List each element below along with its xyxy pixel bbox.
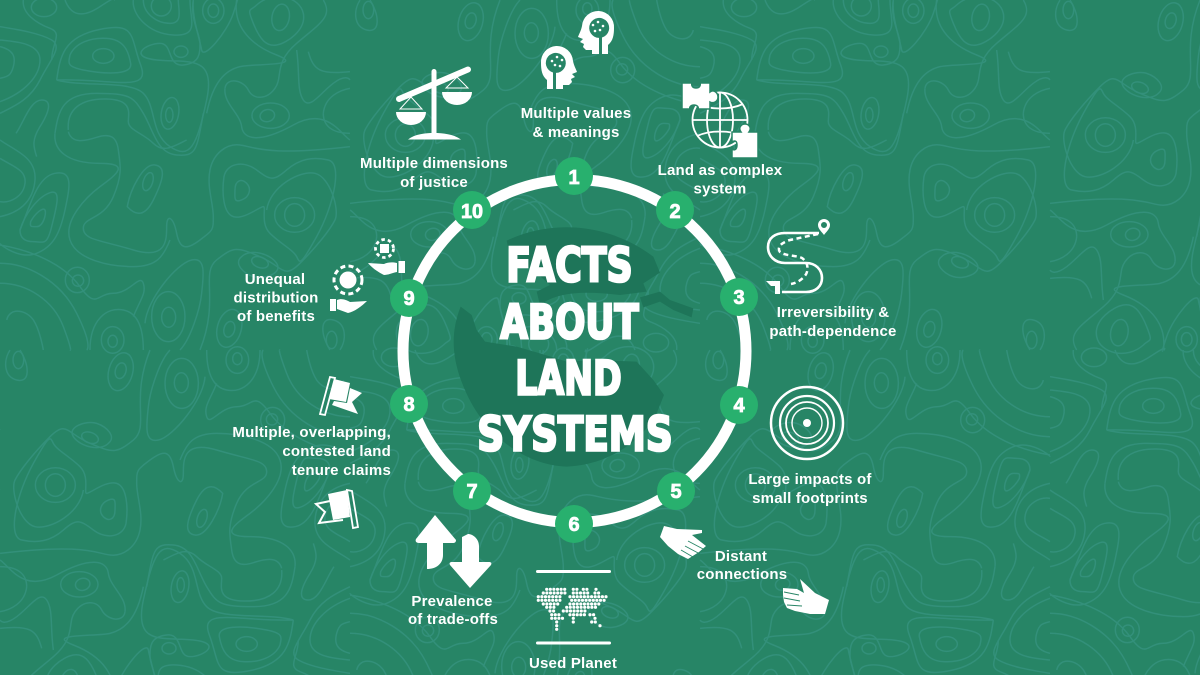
title: ABOUT [500,296,639,351]
icon: trade-off arrows [416,515,491,588]
icon: hands with sun [330,266,367,313]
number badges: 10 [461,201,483,223]
label: unequal distribution: distribution [234,290,318,306]
icon: right hand [783,579,829,614]
label: large impacts: Large impacts of [748,471,872,488]
label: tenure claims: Multiple, overlapping, [232,424,391,441]
globe silhouette [454,227,693,467]
icon: winding path [766,219,830,294]
label: multiple dimensions of justice: of justice [400,174,468,191]
icon: heads [541,11,614,89]
number badges: 4 [733,395,745,417]
central ring [403,180,746,522]
label: prevalence of trade-offs: Prevalence [411,593,493,610]
label: distant connections: Distant [715,548,767,565]
label: tenure claims: contested land [282,443,391,460]
icon: left hand [660,526,706,559]
label: land as complex system: system [694,180,746,198]
number badges: 5 [670,481,682,503]
icon: concentric target [771,387,843,459]
number badges [390,157,758,543]
icon: bottom flag [316,490,358,528]
number badges: 7 [466,481,478,503]
label: large impacts: small footprints [752,490,868,507]
title: FACTS [506,239,633,294]
number badges: 1 [568,167,580,189]
icon: hand with square [368,240,405,275]
label: tenure claims: tenure claims [292,462,391,479]
title: SYSTEMS [477,408,673,463]
label: used planet: Used Planet [529,655,617,672]
label: irreversibility: Irreversibility & [777,304,889,321]
label: land as complex system: Land as complex [658,162,782,179]
label: irreversibility: path-dependence [769,323,897,340]
title: LAND [515,352,622,407]
label: multiple values: Multiple values [521,105,631,122]
number badges: 9 [403,288,415,310]
number badges: 2 [669,201,681,223]
label: unequal distribution: Unequal [245,271,305,288]
icon: top flag [320,377,362,415]
label: distant connections: connections [697,566,787,583]
icon: scales of justice [396,69,472,140]
icon: globe and puzzle pieces [682,83,758,158]
title [477,239,673,463]
label: multiple dimensions of justice: Multiple dimensions [360,155,508,172]
number badges: 3 [733,287,745,309]
label: multiple values: & meanings [532,124,620,141]
label: prevalence of trade-offs: of trade-offs [408,611,498,628]
number badges: 8 [403,394,415,416]
label: unequal distribution: of benefits [237,308,315,325]
icon: used planet dot map [536,570,611,644]
number badges: 6 [568,514,580,536]
